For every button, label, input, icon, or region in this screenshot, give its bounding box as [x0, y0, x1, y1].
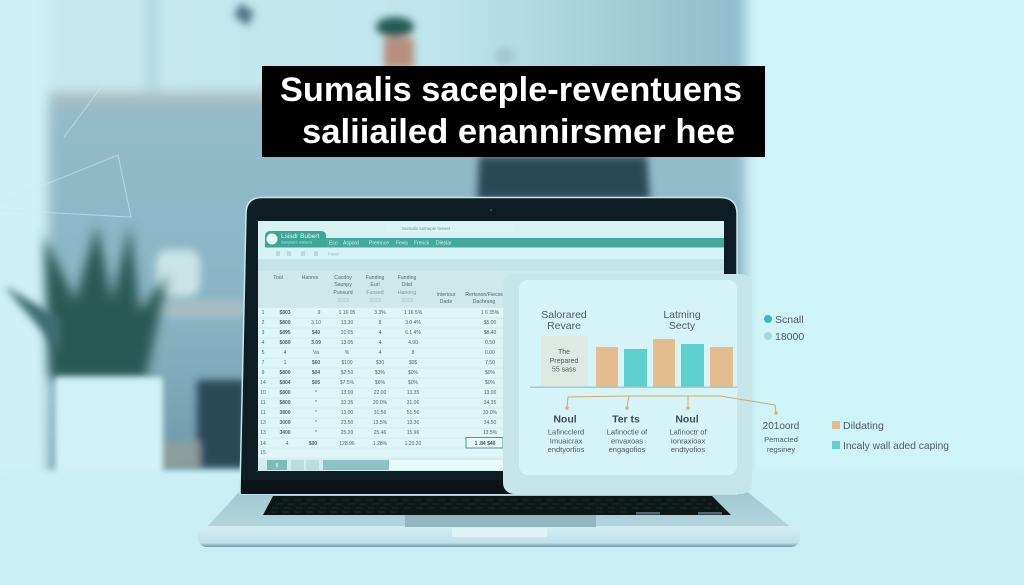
- spreadsheet rows: 13.05: [341, 340, 353, 346]
- spreadsheet rows: 4: [379, 330, 382, 336]
- side note: 201oord: [763, 421, 799, 432]
- spreadsheet rows: $60: [312, 360, 320, 366]
- spreadsheet rows: $0%: [408, 370, 419, 376]
- spreadsheet rows: 31.56: [374, 410, 386, 416]
- spreadsheet rows: 33.35: [341, 400, 353, 406]
- chart heading right: [663, 309, 701, 332]
- spreadsheet rows: $5.00: [484, 320, 496, 326]
- spreadsheet header: 2023: [401, 298, 413, 304]
- spreadsheet rows: $7.5%: [340, 380, 355, 386]
- spreadsheet rows: 7.50: [485, 360, 495, 366]
- spreadsheet rows: 5: [262, 350, 265, 356]
- title banner: [262, 66, 765, 157]
- spreadsheet rows: 13: [260, 420, 266, 426]
- spreadsheet rows: $0%: [485, 370, 496, 376]
- toolbar: [258, 248, 724, 259]
- spreadsheet rows: 9: [318, 310, 321, 316]
- spreadsheet rows: 4: [379, 350, 382, 356]
- spreadsheet header: Funsed: [366, 290, 384, 296]
- keyboard: [263, 496, 731, 515]
- spreadsheet rows: 4.90: [408, 340, 418, 346]
- spreadsheet header: Cacdoy: [334, 275, 352, 281]
- column: Ter ts: Lafinoctie of: [607, 428, 648, 436]
- column: Noul 2: Lafinoctr of: [669, 428, 707, 436]
- spreadsheet header: Saunpy: [334, 282, 352, 288]
- spreadsheet rows: 11: [260, 400, 266, 406]
- spreadsheet rows: 13.00: [341, 410, 353, 416]
- spreadsheet rows: 7: [262, 360, 265, 366]
- spreadsheet rows: 0.50: [485, 340, 495, 346]
- teal ribbon: Fevis: [396, 240, 408, 246]
- spreadsheet rows: $6%: [375, 380, 386, 386]
- spreadsheet rows: 13.30: [341, 320, 353, 326]
- spreadsheet rows: 34.35: [484, 400, 496, 406]
- bottom legend: [832, 420, 949, 452]
- spreadsheet rows: $800: [279, 400, 291, 406]
- side note: [763, 421, 799, 454]
- search bar: Sumalis sameple hrevel: [402, 226, 450, 231]
- spreadsheet header: Tool: [273, 275, 283, 281]
- spreadsheet header: Punsurd: [333, 290, 353, 296]
- floating chart panel: [503, 274, 778, 494]
- side note: Pemacted: [764, 435, 798, 444]
- spreadsheet rows: 3000: [279, 420, 291, 426]
- column: Ter ts: envaxoas: [611, 436, 643, 446]
- spreadsheet rows: 8: [379, 320, 382, 326]
- teal ribbon: Aspord: [343, 240, 359, 246]
- laptop base: [198, 490, 800, 547]
- column: Noul: endtyorfios: [548, 445, 585, 454]
- top legend: Scnall: [775, 314, 804, 326]
- spreadsheet rows: $2.50: [341, 370, 353, 376]
- bar chart: [530, 339, 737, 388]
- spreadsheet rows: $080: [279, 340, 291, 346]
- spreadsheet rows: 13.5%: [373, 420, 388, 426]
- laptop: [198, 198, 800, 547]
- spreadsheet rows: $0$: [409, 360, 417, 366]
- spreadsheet rows: 14: [260, 441, 266, 447]
- spreadsheet header: Dikd: [402, 282, 412, 288]
- spreadsheet rows: 3400: [279, 430, 291, 436]
- spreadsheet rows: $800: [279, 320, 291, 326]
- spreadsheet rows: *: [315, 420, 317, 426]
- spreadsheet rows: 25.20: [341, 430, 353, 436]
- teal ribbon: Lsisdr Bubert: [281, 233, 319, 240]
- column: Noul 2: Ionraxioax: [671, 436, 706, 446]
- selected cell: [466, 438, 503, 448]
- spreadsheet rows: 33.0%: [483, 410, 498, 416]
- spreadsheet rows: 0.00: [485, 350, 495, 356]
- spreadsheet rows: $8.40: [484, 330, 496, 336]
- spreadsheet rows: $0%: [485, 380, 496, 386]
- spreadsheet rows: $804: [279, 380, 291, 386]
- callout box: [541, 336, 588, 386]
- spreadsheet rows: $40: [312, 330, 320, 336]
- top legend: [764, 314, 804, 343]
- spreadsheet rows: 1: [284, 360, 287, 366]
- column: Noul: Noul: [553, 414, 577, 426]
- spreadsheet rows: 51.56: [407, 410, 419, 416]
- spreadsheet rows: 20.0%: [373, 400, 388, 406]
- spreadsheet rows: *: [315, 390, 317, 396]
- decorative thin geometry lines: [0, 35, 140, 217]
- bottom legend: Incaly wall aded caping: [843, 440, 949, 452]
- spreadsheet rows: 11: [260, 410, 266, 416]
- spreadsheet rows: $00: [309, 441, 317, 447]
- column: Noul 2: [669, 414, 707, 454]
- callout box: The: [558, 349, 570, 356]
- spreadsheet rows: 4: [262, 340, 265, 346]
- spreadsheet header: Rertsnon/Fiecss: [465, 292, 503, 298]
- teal ribbon: Premnce: [369, 240, 389, 246]
- spreadsheet rows: 31.05: [341, 330, 353, 336]
- spreadsheet rows: 34.50: [484, 420, 496, 426]
- sheet tab bar: [258, 459, 724, 471]
- side note: regsiney: [767, 445, 795, 454]
- teal ribbon: Eco: [329, 240, 338, 246]
- spreadsheet rows: 1: [262, 310, 265, 316]
- spreadsheet rows: 6.1 4%: [405, 330, 421, 336]
- column: Noul 2: endtyofios: [671, 445, 705, 454]
- title text: [280, 71, 742, 151]
- title text: Sumalis saceple-reventuens: [280, 71, 742, 109]
- spreadsheet rows: %: [345, 350, 350, 356]
- spreadsheet header: [258, 259, 724, 308]
- spreadsheet rows: $30: [376, 360, 384, 366]
- spreadsheet rows: *: [315, 410, 317, 416]
- toolbar: Pand: [328, 252, 339, 256]
- spreadsheet rows: 1 6 35%: [481, 310, 500, 316]
- spreadsheet rows: 8: [412, 350, 415, 356]
- spreadsheet rows: [258, 310, 503, 458]
- spreadsheet rows: 3.10: [311, 320, 321, 326]
- teal ribbon: Samplaten anthems: [281, 240, 312, 244]
- spreadsheet rows: 3.3%: [374, 310, 386, 316]
- spreadsheet rows: 3: [262, 330, 265, 336]
- spreadsheet rows: 23.50: [341, 420, 353, 426]
- teal ribbon: [265, 231, 724, 248]
- spreadsheet rows: 15: [260, 450, 266, 456]
- column: Ter ts: [607, 414, 648, 454]
- spreadsheet rows: $800: [279, 390, 291, 396]
- teal ribbon: Frenck: [414, 240, 430, 246]
- column: Ter ts: engagofios: [609, 445, 646, 454]
- column: Noul: [548, 414, 585, 454]
- spreadsheet rows: 3.0 4%: [405, 320, 421, 326]
- spreadsheet rows: 9: [262, 370, 265, 376]
- spreadsheet rows: 2: [262, 320, 265, 326]
- spreadsheet rows: 15.96: [407, 430, 419, 436]
- callout box: Prepared: [550, 358, 579, 365]
- spreadsheet rows: $3%: [375, 370, 386, 376]
- spreadsheet screen: [258, 221, 724, 471]
- spreadsheet header: Eurl: [370, 282, 380, 288]
- laptop screen bezel: [240, 198, 741, 494]
- spreadsheet rows: 13.5%: [483, 430, 498, 436]
- spreadsheet header: Hanres: [302, 275, 319, 281]
- spreadsheet rows: $05: [312, 380, 320, 386]
- spreadsheet rows: 13.36: [407, 420, 419, 426]
- spreadsheet rows: 13.00: [484, 390, 496, 396]
- spreadsheet rows: 31.06: [407, 400, 419, 406]
- spreadsheet rows: $895: [279, 330, 291, 336]
- chart heading left: [541, 309, 587, 332]
- chart heading left: Salorared: [541, 309, 587, 321]
- sheet tab bar: fi: [276, 464, 278, 470]
- spreadsheet header: 2023: [369, 298, 381, 304]
- spreadsheet rows: 13: [260, 430, 266, 436]
- spreadsheet rows: 1.20.20: [405, 441, 422, 447]
- spreadsheet rows: $04: [312, 370, 320, 376]
- spreadsheet rows: 128.96: [339, 441, 355, 447]
- spreadsheet rows: 22.00: [374, 390, 386, 396]
- spreadsheet header: Hanong: [398, 290, 416, 296]
- column: Noul: Imuaicrax: [550, 436, 583, 446]
- bottom legend: Dildating: [843, 420, 884, 432]
- spreadsheet rows: 1 16 5%: [404, 310, 423, 316]
- spreadsheet header: Funding: [366, 275, 384, 281]
- selected cell: 1 .84 $40: [475, 441, 496, 447]
- spreadsheet rows: 13.00: [341, 390, 353, 396]
- title text: saliiailed enannirsmer hee: [302, 113, 735, 151]
- teal ribbon: Diestar: [436, 240, 452, 246]
- top legend: 18000: [775, 331, 804, 343]
- spreadsheet header: Dachrang: [473, 299, 495, 305]
- spreadsheet rows: 3.09: [311, 340, 321, 346]
- spreadsheet rows: $100: [341, 360, 353, 366]
- spreadsheet rows: Va: [313, 350, 319, 356]
- spreadsheet rows: 10: [260, 390, 266, 396]
- connector line: [565, 396, 778, 415]
- spreadsheet rows: 4: [379, 340, 382, 346]
- column: Noul 2: Noul: [675, 414, 699, 426]
- blurred plant: [4, 225, 168, 477]
- spreadsheet rows: *: [315, 400, 317, 406]
- column: Ter ts: Ter ts: [612, 414, 640, 426]
- spreadsheet rows: $800: [279, 370, 291, 376]
- spreadsheet header: Interiour: [436, 292, 456, 298]
- chart heading right: Secty: [669, 320, 696, 332]
- spreadsheet header: Funding: [398, 275, 416, 281]
- column: Noul: Lafincclerd: [548, 428, 584, 436]
- spreadsheet rows: 1 16 05: [339, 310, 356, 316]
- spreadsheet rows: 1.28%: [373, 441, 388, 447]
- spreadsheet rows: 25.46: [374, 430, 386, 436]
- spreadsheet header: 2023: [337, 298, 349, 304]
- spreadsheet rows: $803: [279, 310, 291, 316]
- spreadsheet rows: 4: [286, 441, 289, 447]
- chart heading left: Revare: [547, 320, 581, 332]
- spreadsheet rows: 13.35: [407, 390, 419, 396]
- spreadsheet rows: 4: [284, 350, 287, 356]
- spreadsheet rows: 14: [260, 380, 266, 386]
- spreadsheet header: Dade: [440, 299, 452, 305]
- spreadsheet rows: $0%: [408, 380, 419, 386]
- chart heading right: Latming: [663, 309, 701, 321]
- callout box: 55 sass: [552, 366, 577, 374]
- spreadsheet rows: *: [315, 430, 317, 436]
- search bar: [385, 224, 515, 232]
- spreadsheet rows: 3800: [279, 410, 291, 416]
